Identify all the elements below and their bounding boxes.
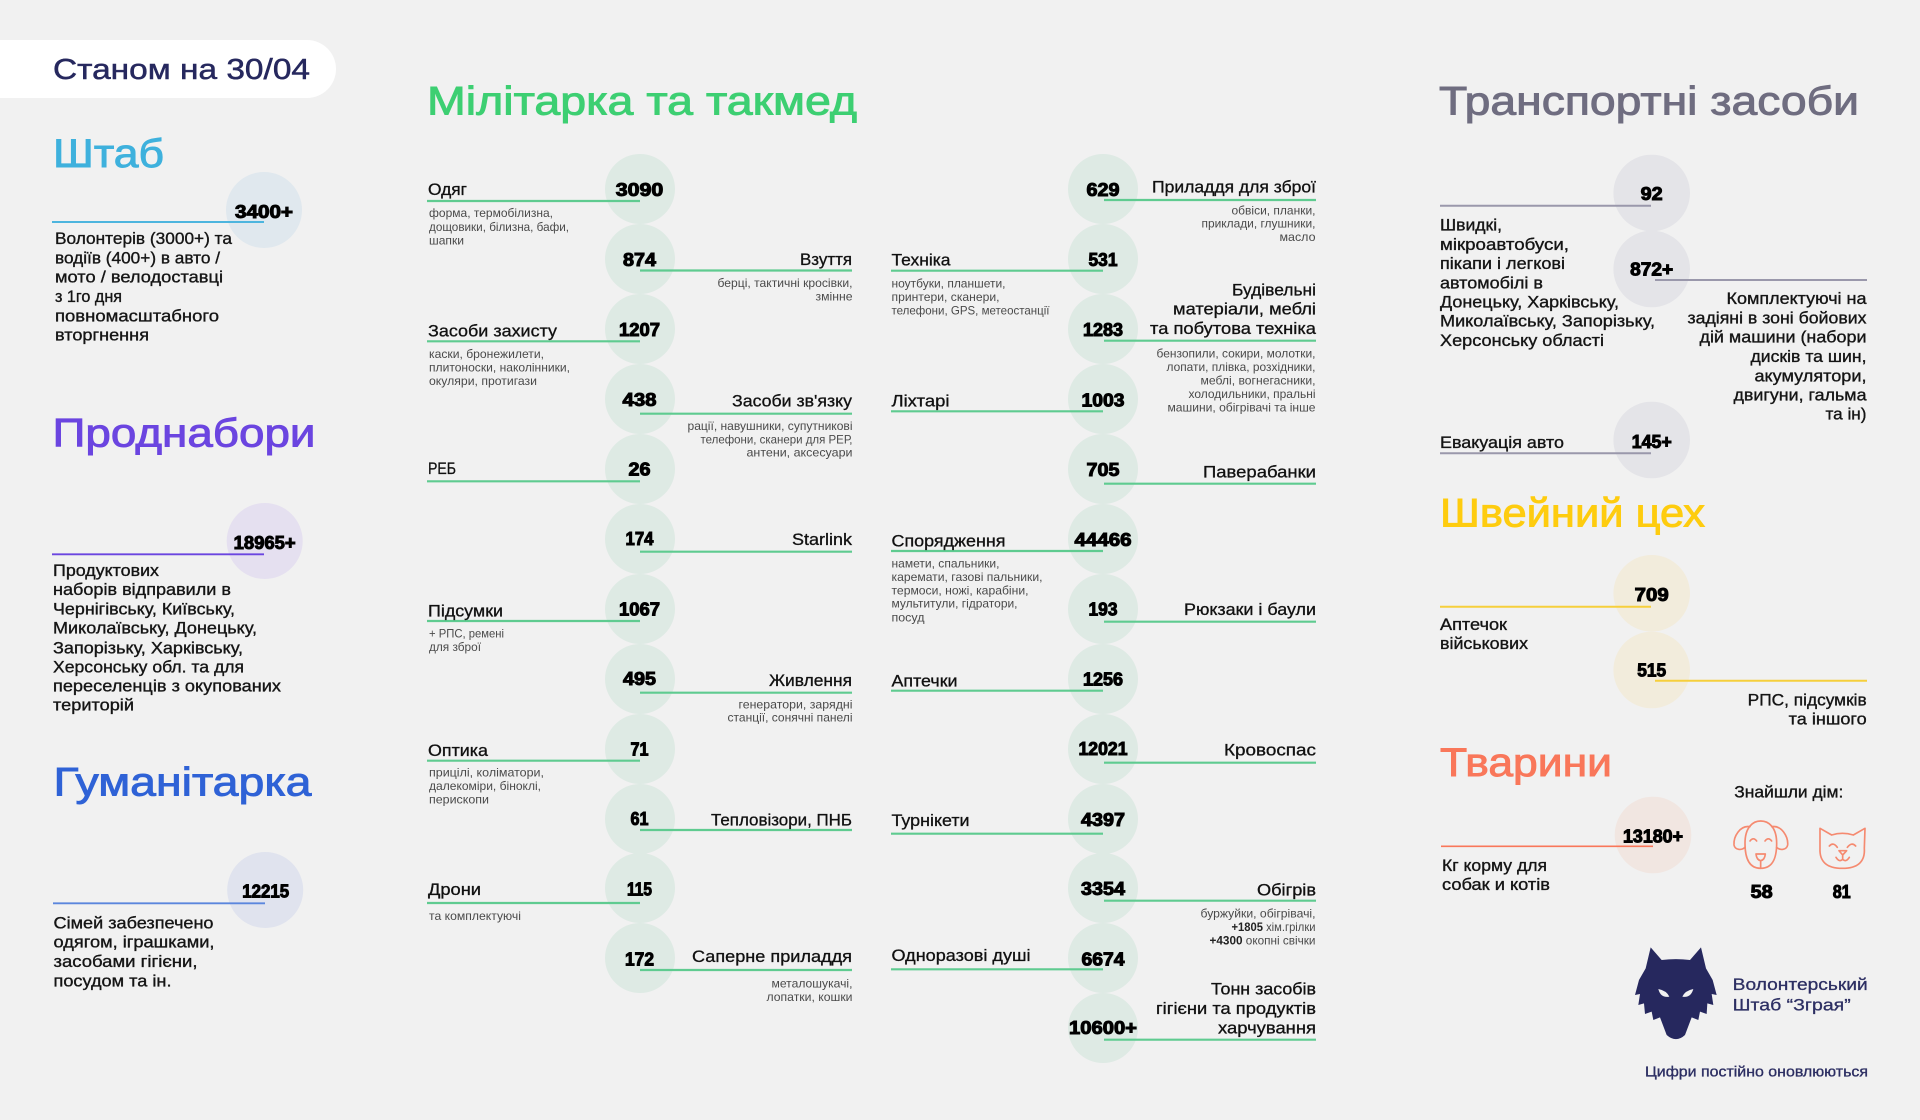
logo text: Штаб “Зграя” [1733,995,1851,1014]
row: Дрони: Дрони [428,881,481,899]
row: Техніка [891,224,1138,317]
stat: 13180+: 13180+ [1623,826,1683,846]
heading: Тварини: Тварини [1440,741,1612,785]
row: Паверабанки: 705 [1086,460,1120,480]
row: Одяг: Одяг [428,181,467,199]
heading: Штаб: Штаб [53,132,164,176]
row: Оптика: Оптика [428,742,489,760]
stat: 92 [1440,155,1690,350]
stat: 872+ [1613,231,1867,423]
panel: Транспортні засоби [1439,80,1867,478]
row: Ліхтарі: 1003 [1082,390,1124,410]
stat: 515: РПС, підсумків [1748,691,1867,709]
stat: 92: 92 [1641,184,1663,204]
row: Рюкзаки і баули: Рюкзаки і баули [1184,601,1316,619]
footnote: Цифри постійно оновлюються [1645,1064,1868,1081]
row: Спорядження: 44466 [1074,530,1132,550]
row: Техніка: Техніка [892,252,951,270]
text: food sets: Запорізьку, Харківську, [53,639,243,657]
row: Живлення: генератори, зарядні [738,697,852,711]
row: Будівельні матеріали: 1283 [1083,320,1123,340]
heading: Транспортні засоби: Транспортні засоби [1439,80,1859,124]
row: Засоби захисту: плитоноски, наколінники, [429,361,570,375]
logo text: Волонтерський [1733,975,1868,994]
row: Тонн засобів гігієни: гігієни та продуктів [1156,1000,1316,1018]
row: Спорядження: намети, спальники, [892,557,1000,571]
row: Спорядження: термоси, ножі, карабіни, [892,583,1028,597]
row: Турнікети: 4397 [1081,810,1125,830]
row: Тонн засобів гігієни [1068,981,1316,1063]
row: Засоби зв'язку: антени, аксесуари [746,446,852,460]
panel: Проднабори [52,412,316,715]
text: food sets: переселенців з окупованих [53,678,282,696]
panel: military column 2 [891,154,1317,1063]
icon: dog [1734,821,1788,868]
row: Одяг: 3090 [616,180,663,200]
heading: Мілітарка та такмед: Мілітарка та такмед [427,80,857,124]
row: Аптечки: Аптечки [892,672,958,690]
row: Засоби зв'язку [605,364,853,460]
logo: wolf [1635,947,1717,1039]
row: Взуття: Взуття [800,251,852,269]
row: Одяг: дощовики, білизна, бафи, [429,220,569,234]
stat: 872+: та ін) [1826,405,1866,423]
row: Кровоспас [1068,714,1316,784]
text: families: засобами гігієни, [54,953,198,971]
row: Аптечки [891,644,1138,714]
text: food sets: наборів відправили в [53,581,231,599]
icon: cat [1820,828,1865,868]
text: food sets: Продуктових [53,562,160,580]
row: Приладдя для зброї: обвіси, планки, [1232,203,1316,217]
heading: Проднабори: Проднабори [52,412,316,456]
row: Техніка: 531 [1088,250,1118,270]
row: Одяг: шапки [429,233,464,247]
label: found a home: Знайшли дім: [1734,783,1843,801]
stat: 872+: двигуни, гальма [1734,387,1867,405]
row: Спорядження: мультитули, гідратори, [892,597,1018,611]
row: Приладдя для зброї [1068,154,1316,244]
row: Тонн засобів гігієни: харчування [1218,1019,1316,1037]
number: dogs 58: 58 [1751,882,1773,902]
stat: 13180+ [1441,797,1691,894]
row: Будівельні матеріали: лопати, плівка, розхідники, [1166,360,1316,374]
row: Тонн засобів гігієни: Тонн засобів [1211,981,1316,999]
stat: 92: автомобілі в [1440,274,1543,292]
row: Оптика [427,714,675,806]
stat: 12215 [53,852,303,928]
row: Засоби захисту [427,294,675,388]
row: Будівельні матеріали: Будівельні [1232,281,1316,299]
stat: 872+: 872+ [1630,259,1673,279]
row: Турнікети: Турнікети [892,812,970,830]
row: Одноразові душі: Одноразові душі [892,947,1030,965]
row: Оптика: далекоміри, біноклі, [429,779,541,793]
text: volunteers: з 1го дня [55,288,122,306]
row: Підсумки: для зброї [429,640,482,654]
stat: 13180+: Кг корму для [1442,857,1547,875]
stat: 872+: дисків та шин, [1750,348,1866,366]
stat: 145+ [1440,402,1690,478]
row: Тепловізори, ПНБ [605,784,852,854]
row: Взуття [605,224,853,304]
row: Живлення: 495 [623,669,656,689]
row: Засоби захисту: каски, бронежилети, [429,347,544,361]
row: РЕБ: РЕБ [428,460,456,478]
stat: 872+: дій машини (набори [1700,329,1866,347]
row: Одяг: форма, термобілизна, [429,206,553,220]
row: Будівельні матеріали: машини, обігрівачі та інше [1168,400,1316,414]
row: Аптечки: 1256 [1083,670,1123,690]
stat: 12215: 12215 [242,882,289,902]
row: Обігрів: +1805 хім.грілки [1232,920,1316,934]
text: volunteers: повномасштабного [55,307,219,325]
panel: Швейний цех [1440,492,1867,729]
row: Паверабанки [1068,434,1316,504]
row: Саперне приладдя: лопатки, кошки [766,990,852,1004]
stat: 92: мікроавтобуси, [1440,236,1569,254]
text: volunteers [55,230,233,345]
row: Обігрів: Обігрів [1257,881,1316,899]
row: Оптика: прицілі, коліматори, [429,766,544,780]
row: Саперне приладдя: 172 [625,950,654,970]
stat: 92: Швидкі, [1440,217,1502,235]
row: Кровоспас: Кровоспас [1224,742,1316,760]
row: Засоби захисту: Засоби захисту [428,323,558,341]
stat: 515 [1613,632,1867,729]
row: Ліхтарі [891,364,1138,434]
row: Саперне приладдя: металошукачі, [772,976,852,990]
row: Starlink: Starlink [792,531,853,549]
row: Тепловізори, ПНБ: 61 [630,809,648,829]
logo text [1733,975,1868,1014]
row: Турнікети [891,784,1138,854]
row: Обігрів: буржуйки, обігрівачі, [1200,907,1316,921]
row: Взуття: змінне [816,290,853,304]
row: Тонн засобів гігієни: 10600+ [1069,1018,1137,1038]
row: Приладдя для зброї: масло [1280,230,1316,244]
row: Будівельні матеріали: холодильники, пральні [1188,387,1316,401]
panel: Гуманітарка [53,761,312,990]
row: Одноразові душі: 6674 [1082,950,1124,970]
row: Живлення: станції, сонячні панелі [728,711,852,725]
row: Паверабанки: Паверабанки [1203,463,1316,481]
row: Засоби зв'язку: рації, навушники, супутникові [688,419,852,433]
row: Засоби зв'язку: Засоби зв'язку [732,393,853,411]
row: Техніка: принтери, сканери, [892,290,1000,304]
stat: 145+: Евакуація авто [1440,434,1564,452]
row: Саперне приладдя: Саперне приладдя [692,948,852,966]
row: Тепловізори, ПНБ: Тепловізори, ПНБ [711,811,852,829]
row: Техніка: телефони, GPS, метеостанції [892,303,1050,317]
heading: Гуманітарка: Гуманітарка [54,761,312,805]
text: volunteers: мото / велодоставці [55,269,223,287]
text: volunteers: Волонтерів (3000+) та [55,230,233,248]
row: Будівельні матеріали: та побутова техніка [1150,320,1317,338]
row: Приладдя для зброї: Приладдя для зброї [1152,178,1316,196]
row: Дрони [427,853,675,923]
row: Starlink: 174 [626,529,654,549]
row: Спорядження: посуд [892,610,925,624]
stat: 872+: задіяні в зоні бойових [1688,309,1867,327]
row: Підсумки: 1067 [619,600,660,620]
row: Спорядження [891,504,1138,624]
text: volunteers: вторгнення [55,327,149,345]
stat: 709: 709 [1635,585,1669,605]
row: Оптика: 71 [630,740,648,760]
stat: 18965+ [52,503,303,579]
stat: 92: пікапи і легкові [1440,255,1565,273]
row: Дрони: 115 [627,879,652,899]
row: Спорядження: каремати, газові пальники, [892,570,1042,584]
row: Одноразові душі [891,923,1138,993]
row: Спорядження: Спорядження [892,533,1006,551]
row: РЕБ [427,434,675,504]
text: families [54,914,214,990]
stat: 515: та іншого [1789,711,1867,729]
row: Підсумки: Підсумки [428,603,503,621]
stat: 872+: акумулятори, [1754,367,1866,385]
stat: 92: Донецьку, Харківську, [1440,294,1619,312]
row: Рюкзаки і баули [1068,574,1316,644]
row: Підсумки: + РПС, ремені [429,626,504,640]
text: food sets [53,562,282,715]
row: Приладдя для зброї: приклади, глушники, [1202,217,1316,231]
number: cats 81: 81 [1833,882,1851,902]
panel: military column 1 [427,154,853,1004]
row: Живлення: Живлення [769,672,852,690]
row: Одяг [427,154,675,247]
row: Обігрів: 3354 [1081,879,1125,899]
stat: 18965+: 18965+ [234,533,296,553]
date pill [0,40,336,98]
stat: 3400+: 3400+ [235,202,293,222]
row: Ліхтарі: Ліхтарі [892,392,950,410]
row: Будівельні матеріали: меблі, вогнегасники, [1200,373,1316,387]
stat: 92: Херсонську області [1440,332,1604,350]
row: Засоби захисту: окуляри, протигази [429,374,537,388]
row: Будівельні матеріали: матеріали, меблі [1173,301,1316,319]
row: Взуття: берці, тактичні кросівки, [718,276,852,290]
stat: 872+: Комплектуючі на [1726,290,1867,308]
heading: Швейний цех: Швейний цех [1440,492,1705,536]
stat: 709: військових [1440,635,1529,653]
stat: 92: Миколаївську, Запорізьку, [1440,313,1655,331]
row: Підсумки [427,574,675,654]
stat: 515: 515 [1637,661,1666,681]
text: families: посудом та ін. [54,972,172,990]
stat: 145+: 145+ [1632,432,1672,452]
row: Кровоспас: 12021 [1078,739,1128,759]
stat: 3400+ [52,172,302,248]
text: food sets: Херсонську обл. та для [53,658,244,676]
row: Саперне приладдя [605,923,852,1004]
row: Дрони: та комплектуючі [429,909,521,923]
row: Starlink [605,504,853,574]
row: Техніка: ноутбуки, планшети, [892,276,1006,290]
text: families: Сімей забезпечено [54,914,214,932]
row: Обігрів [1068,853,1316,947]
row: Будівельні матеріали [1068,281,1317,414]
row: Рюкзаки і баули: 193 [1088,599,1118,619]
row: Засоби захисту: 1207 [619,320,660,340]
stat: 13180+: собак и котів [1442,876,1550,894]
row: Взуття: 874 [623,250,656,270]
text: families: одягом, іграшками, [54,934,214,952]
text: volunteers: водіїв (400+) в авто / [55,249,220,267]
text: food sets: територій [53,697,134,715]
row: Засоби зв'язку: телефони, сканери для РЕР, [700,432,852,446]
row: Приладдя для зброї: 629 [1086,180,1120,200]
date pill: Станом на 30/04 [53,54,310,86]
text: food sets: Чернігівську, Київську, [53,600,235,618]
stat: 709: Аптечок [1440,616,1508,634]
stat: 709 [1440,555,1690,653]
row: Живлення [605,644,852,725]
row: Оптика: перископи [429,792,489,806]
row: Будівельні матеріали: бензопили, сокири, молотки, [1156,346,1316,360]
row: Засоби зв'язку: 438 [622,390,656,410]
text: food sets: Миколаївську, Донецьку, [53,620,257,638]
panel: Тварини [1440,741,1865,902]
panel: Штаб [52,132,302,345]
row: РЕБ: 26 [628,460,650,480]
row: Обігрів: +4300 окопні свічки [1210,933,1316,947]
